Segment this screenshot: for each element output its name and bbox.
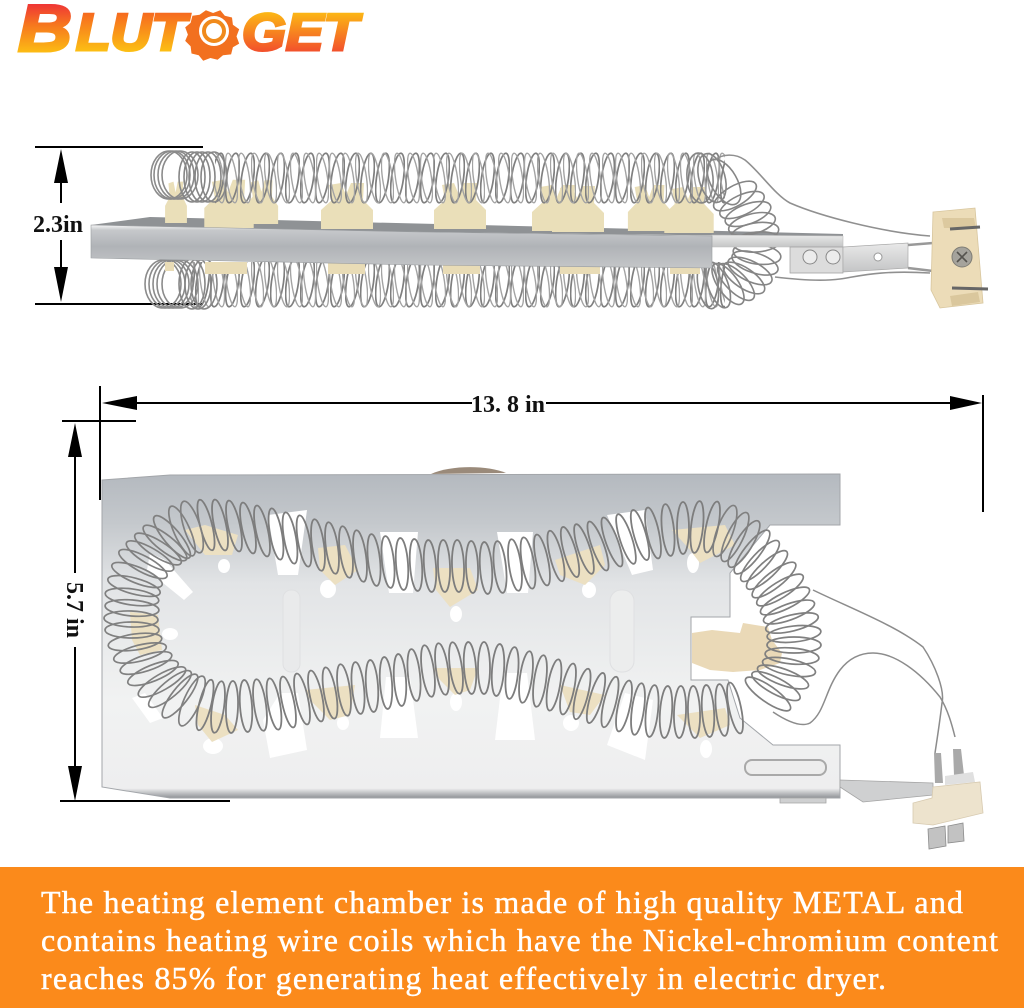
- dimension: height 5.7 in: [60, 423, 230, 801]
- right coil end: [685, 150, 782, 311]
- ceramic terminal block: [931, 208, 988, 308]
- caption text: [41, 884, 998, 996]
- rail top surface: [91, 217, 843, 237]
- logo letters GET: GET: [242, 4, 363, 62]
- lower coil band: [145, 259, 725, 309]
- rail front face: [91, 225, 712, 268]
- pivot dome behind plate: [431, 467, 506, 474]
- caption text: The heating element chamber is made of high quality METAL and: [41, 884, 963, 920]
- ceramic terminal connector: [913, 749, 983, 849]
- ceramic clips below rail: [165, 262, 700, 274]
- lead wires: [773, 590, 955, 753]
- plate holes: [132, 510, 712, 760]
- logo gear icon: [185, 10, 239, 61]
- caption text: reaches 85% for generating heat effectively in electric dryer.: [41, 960, 886, 996]
- logo letters LUT: LUT: [76, 4, 191, 62]
- plate dimples and slot: [283, 590, 826, 775]
- product photo: front view of heating element: [102, 467, 983, 849]
- dimension: height 2.3in: [33, 147, 203, 304]
- dimension: height 2.3in: 2.3in: [33, 212, 83, 238]
- dimension: height 5.7 in: 5.7 in: [61, 582, 87, 638]
- mounting bracket: [790, 243, 933, 273]
- lead wires: [715, 155, 930, 280]
- product photo: top side view of heating element: [91, 150, 988, 311]
- metal plate: [102, 474, 840, 798]
- logo: Blutoget: [18, 0, 363, 65]
- dimension: width 13.8 in: 13. 8 in: [471, 392, 545, 418]
- heating coil: [104, 498, 822, 738]
- caption banner: [0, 867, 1024, 1008]
- thin upper rail extension: [712, 235, 843, 247]
- ceramic insulators: [130, 525, 782, 742]
- ceramic clips top: [165, 180, 714, 233]
- dimension: width 13.8 in: [62, 386, 983, 512]
- lower right mount bracket: [780, 780, 933, 803]
- upper coil band: [151, 151, 725, 205]
- caption text: contains heating wire coils which have the Nickel-chromium content: [41, 922, 998, 958]
